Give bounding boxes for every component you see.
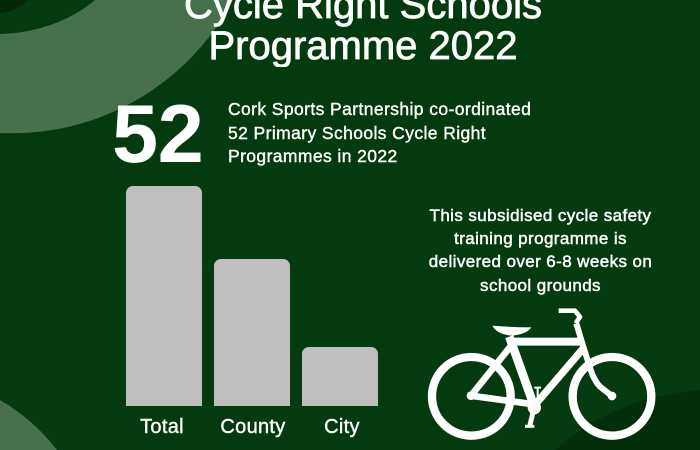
bar chart <box>126 186 378 438</box>
label: Total: Total <box>140 416 184 438</box>
title <box>184 0 542 67</box>
big number 52: 52 <box>112 87 203 180</box>
bar: City <box>302 347 378 406</box>
description text <box>228 99 531 166</box>
bar: Total <box>126 186 202 406</box>
description text: 52 Primary Schools Cycle Right <box>228 122 486 142</box>
subsidised programme text <box>429 206 652 295</box>
label: County: County <box>220 416 286 438</box>
label: City: City <box>324 416 360 438</box>
description text: Programmes in 2022 <box>228 146 398 166</box>
subsidised programme text: delivered over 6-8 weeks on <box>429 252 652 271</box>
subsidised programme text: training programme is <box>454 229 627 248</box>
bar: County <box>214 259 290 406</box>
subsidised programme text: school grounds <box>480 276 601 295</box>
description text: Cork Sports Partnership co-ordinated <box>228 99 531 119</box>
subsidised programme text: This subsidised cycle safety <box>430 206 651 224</box>
title: Programme 2022 <box>208 24 518 67</box>
